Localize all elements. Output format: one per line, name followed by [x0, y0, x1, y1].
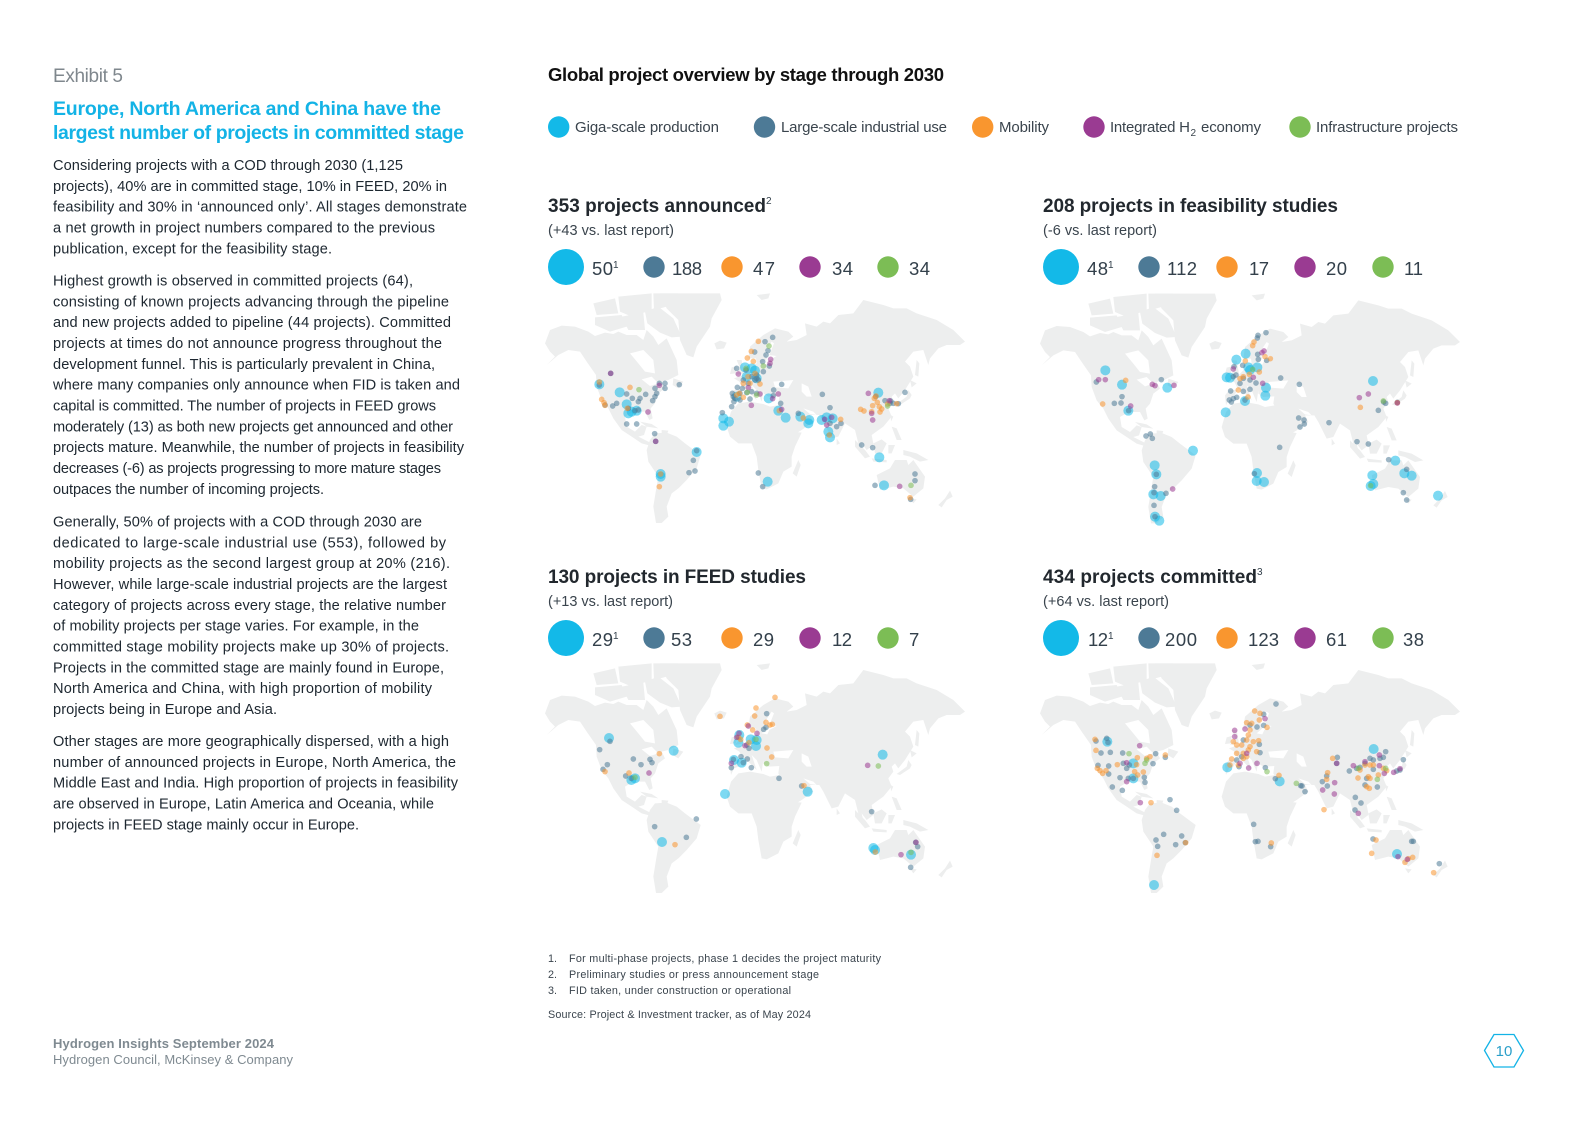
counts: committed: 12 — [1088, 629, 1108, 650]
counts: FEED: 1 — [613, 631, 619, 642]
footer — [53, 1036, 294, 1067]
legend: economy — [1201, 119, 1262, 136]
text block: paragraph 3: Projects in the committed stage are mainly found in Europe, — [53, 660, 444, 676]
text block: paragraph 3: However, while large-scale industrial projects are the largest — [53, 577, 447, 593]
panel: FEED: 130 projects in FEED studies — [548, 567, 806, 588]
legend — [548, 116, 1458, 139]
text block: paragraph 2 — [52, 274, 465, 498]
text block: paragraph 1: Considering projects with a COD through 2030 (1,125 — [53, 158, 403, 174]
counts: announced: 50 — [592, 258, 613, 279]
panel: feasibility: (-6 vs. last report) — [1043, 223, 1157, 239]
page number badge — [1484, 1034, 1524, 1067]
counts: announced — [548, 249, 930, 285]
counts: committed: 61 — [1326, 629, 1347, 650]
counts: feasibility: 11 — [1404, 258, 1423, 279]
text block: paragraph 1: a net growth in project numbers compared to the previous — [53, 220, 435, 236]
counts: announced: 1 — [613, 260, 619, 271]
text block: paragraph 3: North America and China, with high proportion of mobility — [53, 681, 433, 697]
text block: paragraph 3: projects being in Europe and Asia. — [53, 702, 277, 718]
counts: announced: 47 — [753, 258, 775, 279]
map: FEED — [545, 663, 965, 893]
page number badge: 10 — [1496, 1043, 1512, 1060]
heading — [53, 98, 464, 144]
footnotes: Preliminary studies or press announcement stage — [569, 969, 819, 981]
counts: FEED: 12 — [832, 629, 852, 650]
footnotes: 2. — [548, 969, 557, 981]
counts: announced: 34 — [909, 258, 930, 279]
text block: paragraph 2: projects mature. Meanwhile, the number of projects in feasibility — [53, 440, 465, 456]
footnotes: FID taken, under construction or operational — [569, 985, 791, 997]
counts: feasibility: 17 — [1249, 258, 1269, 279]
map: feasibility — [1040, 294, 1460, 526]
text block: paragraph 2: and new projects added to pipeline (44 projects). Committed — [53, 315, 451, 331]
text block: paragraph 2: moderately (13) as both new projects get announced and other — [53, 419, 453, 435]
panel: FEED: (+13 vs. last report) — [548, 594, 673, 610]
text block: paragraph 3 — [53, 514, 450, 718]
footnotes: 1. — [548, 953, 557, 965]
counts: committed: 1 — [1108, 631, 1114, 642]
legend: Giga-scale production — [575, 119, 719, 136]
text block: paragraph 1 — [53, 158, 467, 257]
legend: Integrated H — [1110, 119, 1190, 136]
counts: feasibility — [1043, 249, 1423, 285]
legend: Large-scale industrial use — [781, 119, 947, 136]
counts: feasibility: 112 — [1167, 258, 1197, 279]
legend: 2 — [1190, 128, 1196, 139]
text block: paragraph 4 — [53, 734, 459, 833]
text block: paragraph 4: number of announced projects in Europe, North America, the — [53, 755, 456, 771]
panel: announced: 2 — [766, 196, 772, 207]
footnotes: Source: Project & Investment tracker, as of May 2024 — [548, 1009, 811, 1021]
panel: feasibility: 208 projects in feasibility studies — [1043, 196, 1338, 217]
legend: Infrastructure projects — [1316, 119, 1458, 136]
text block: paragraph 2: Highest growth is observed in committed projects (64), — [53, 274, 413, 290]
counts: announced: 188 — [672, 258, 702, 279]
text block: paragraph 1: feasibility and 30% in ‘announced only’. All stages demonstrate — [53, 200, 467, 216]
panel: announced: 353 projects announced — [548, 196, 766, 217]
text block: paragraph 4: are observed in Europe, Latin America and Oceania, while — [53, 796, 434, 812]
text block: paragraph 2: development funnel. This is particularly prevalent in China, — [53, 357, 435, 373]
panel: committed — [1040, 567, 1460, 893]
counts: committed: 123 — [1248, 629, 1279, 650]
counts: feasibility: 20 — [1326, 258, 1347, 279]
exhibit label: Exhibit 5 — [53, 66, 123, 87]
text block: paragraph 1: projects), 40% are in committed stage, 10% in FEED, 20% in — [53, 179, 447, 195]
counts: FEED — [548, 620, 919, 656]
footnotes: 3. — [548, 985, 557, 997]
panel: committed: 434 projects committed — [1043, 567, 1257, 588]
counts: FEED: 53 — [671, 629, 692, 650]
counts: announced: 34 — [832, 258, 853, 279]
text block: paragraph 2: capital is committed. The number of projects in FEED grows — [53, 398, 436, 414]
panel: committed: 3 — [1257, 567, 1263, 578]
text block: paragraph 1: publication, except for the feasibility stage. — [53, 241, 332, 257]
panel: announced: (+43 vs. last report) — [548, 223, 674, 239]
chart title: Global project overview by stage through 2030 — [548, 64, 944, 85]
counts: FEED: 29 — [592, 629, 613, 650]
text block: paragraph 3: mobility projects as the second largest group at 20% (216). — [53, 556, 450, 572]
counts: feasibility: 1 — [1108, 260, 1114, 271]
map: announced — [545, 293, 965, 523]
counts: FEED: 7 — [909, 629, 919, 650]
counts: committed — [1043, 620, 1424, 656]
text block: paragraph 2: where many companies only announce when FID is taken and — [52, 378, 460, 394]
text block: paragraph 2: consisting of known projects advancing through the pipeline — [53, 294, 449, 310]
text block: paragraph 4: projects in FEED stage mainly occur in Europe. — [53, 817, 359, 833]
text block: paragraph 3: committed stage mobility projects make up 30% of projects. — [53, 639, 449, 655]
counts: feasibility: 48 — [1087, 258, 1108, 279]
text block: paragraph 3: category of projects across every stage, the relative number — [53, 598, 446, 614]
panel: committed: (+64 vs. last report) — [1043, 594, 1169, 610]
text block: paragraph 3: Generally, 50% of projects with a COD through 2030 are — [53, 514, 422, 530]
counts: committed: 200 — [1165, 629, 1197, 650]
text block: paragraph 3: dedicated to large-scale industrial use (553), followed by — [53, 535, 447, 551]
heading: Europe, North America and China have the — [53, 98, 441, 120]
text block: paragraph 2: projects at times do not announce progress throughout the — [53, 336, 442, 352]
counts: committed: 38 — [1403, 629, 1424, 650]
text block: paragraph 4: Middle East and India. High proportion of projects in feasibility — [53, 776, 459, 792]
legend: Mobility — [999, 119, 1050, 136]
panel: FEED — [545, 567, 965, 893]
text block: paragraph 3: of mobility projects per stage varies. For example, in the — [53, 619, 419, 635]
footer: Hydrogen Insights September 2024 — [53, 1036, 275, 1051]
counts: FEED: 29 — [753, 629, 774, 650]
footnotes: For multi-phase projects, phase 1 decides the project maturity — [569, 953, 882, 965]
footer: Hydrogen Council, McKinsey & Company — [53, 1052, 294, 1067]
panel: feasibility — [1040, 196, 1460, 526]
text block: paragraph 2: outpaces the number of incoming projects. — [53, 482, 324, 498]
map: committed — [1040, 663, 1460, 893]
text block: paragraph 2: decreases (-6) as projects progressing to more mature stages — [53, 461, 441, 477]
text block: paragraph 4: Other stages are more geographically dispersed, with a high — [53, 734, 449, 750]
heading: largest number of projects in committed stage — [53, 122, 464, 144]
footnotes — [548, 953, 882, 1021]
panel: announced — [545, 196, 965, 523]
